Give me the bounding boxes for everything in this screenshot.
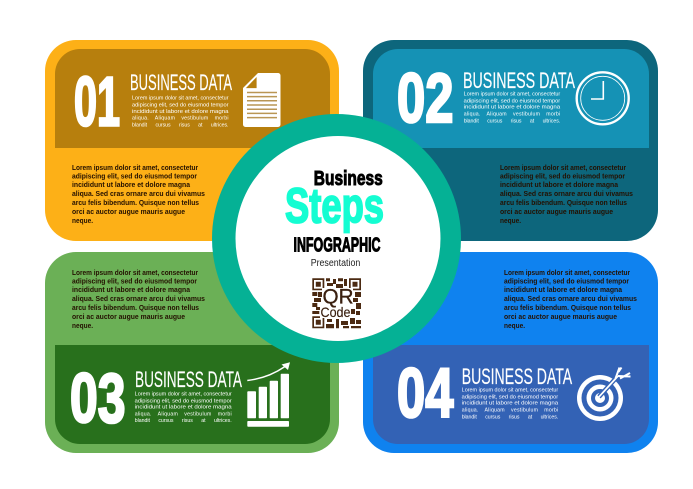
text block: step 03 summary: incididunt ut labore et dolore magna xyxy=(135,404,232,410)
text block: step 04 summary: Lorem ipsum dolor sit amet, consectetur xyxy=(462,388,558,394)
text block: step 02 details: neque. xyxy=(500,216,521,225)
title: Business: Business xyxy=(314,167,383,190)
text block: step 01 summary xyxy=(132,95,229,128)
text block: step 04 summary: aliqua. Aliquam vestibulum morbi xyxy=(462,407,558,413)
text block: step 01 summary: aliqua. Aliquam vestibulum morbi xyxy=(132,116,228,122)
text block: step 04 summary: adipiscing elit, sed do eiusmod tempor xyxy=(462,394,558,400)
text block: step 03 details: neque. xyxy=(72,321,93,330)
text block: step 02 details: incididunt ut labore et dolore magna xyxy=(500,180,619,189)
text block: step 01 details: neque. xyxy=(72,216,93,225)
text block: step 04 details: arcu felis bibendum. Quisque non tellus xyxy=(504,303,631,312)
text block: step 03 summary: aliqua. Aliquam vestibulum morbi xyxy=(135,411,232,417)
text block: step 04 details: aliqua. Sed cras ornare arcu dui vivamus xyxy=(504,294,637,303)
heading: step 02: BUSINESS DATA xyxy=(463,68,575,93)
text block: step 03 details: Lorem ipsum dolor sit amet, consectetur xyxy=(72,268,198,277)
text block: step 02 summary: aliqua. Aliquam vestibulum morbi xyxy=(464,112,560,118)
text block: step 04 details: adipiscing elit, sed do eiusmod tempor xyxy=(504,277,629,286)
text block: step 03 summary: blandit cursus risus at ultrices. xyxy=(135,418,232,424)
panel: central circle xyxy=(212,114,461,363)
title: Steps: Steps xyxy=(285,180,384,234)
text block: step 01 details: Lorem ipsum dolor sit amet, consectetur xyxy=(72,163,198,172)
text block: step 02 details: aliqua. Sed cras ornare arcu dui vivamus xyxy=(500,189,633,198)
text block: step 02 summary xyxy=(464,92,560,124)
text block: step 01 details xyxy=(72,163,205,225)
heading: step 03: BUSINESS DATA xyxy=(135,367,242,392)
text block: step 04 summary: incididunt ut labore et dolore magna xyxy=(462,400,558,406)
icon: rising bar chart xyxy=(247,362,290,427)
text block: step 01 summary: incididunt ut labore et dolore magna xyxy=(132,109,229,115)
text block: step 02 details: Lorem ipsum dolor sit amet, consectetur xyxy=(500,163,626,172)
text block: step 01 details: incididunt ut labore et dolore magna xyxy=(72,180,191,189)
text block: step 04 details: orci ac auctor augue mauris augue xyxy=(504,312,617,321)
icon: target with arrow xyxy=(577,368,630,421)
text block: step 02 details: orci ac auctor augue mauris augue xyxy=(500,207,613,216)
number 04: 04 xyxy=(397,354,454,432)
QR code: QR xyxy=(322,286,354,309)
text block: step 01 details: aliqua. Sed cras ornare arcu dui vivamus xyxy=(72,189,205,198)
text block: step 03 summary xyxy=(135,392,232,424)
text block: step 03 summary: adipiscing elit, sed do eiusmod tempor xyxy=(135,398,232,404)
heading: step 01: BUSINESS DATA xyxy=(130,70,232,95)
panel: step 02 xyxy=(363,40,658,241)
text block: step 02 summary: Lorem ipsum dolor sit amet, consectetur xyxy=(464,92,560,98)
text block: step 02 summary: incididunt ut labore et dolore magna xyxy=(464,105,560,111)
text block: step 01 summary: adipiscing elit, sed do eiusmod tempor xyxy=(132,102,229,108)
subtitle: Presentation: Presentation xyxy=(311,258,360,269)
text block: step 01 details: orci ac auctor augue mauris augue xyxy=(72,207,185,216)
panel: step 01 xyxy=(45,40,339,241)
text block: step 04 details: neque. xyxy=(504,321,525,330)
number 03: 03 xyxy=(70,359,126,437)
title: INFOGRAPHIC: INFOGRAPHIC xyxy=(294,234,380,256)
text block: step 04 details: incididunt ut labore et dolore magna xyxy=(504,285,623,294)
text block: step 01 summary: blandit cursus risus at ultrices. xyxy=(132,122,228,128)
text block: step 03 details: incididunt ut labore et dolore magna xyxy=(72,285,191,294)
text block: step 03 details: orci ac auctor augue mauris augue xyxy=(72,312,185,321)
text block: step 02 summary: adipiscing elit, sed do eiusmod tempor xyxy=(464,99,560,105)
text block: step 02 summary: blandit cursus risus at ultrices. xyxy=(464,118,560,124)
QR code xyxy=(312,278,361,328)
text block: step 01 details: adipiscing elit, sed do eiusmod tempor xyxy=(72,172,197,181)
text block: step 04 details: Lorem ipsum dolor sit amet, consectetur xyxy=(504,268,630,277)
icon: document xyxy=(243,73,280,127)
text block: step 02 details xyxy=(500,163,633,225)
text block: step 03 details: arcu felis bibendum. Quisque non tellus xyxy=(72,303,199,312)
text block: step 03 details xyxy=(72,268,205,330)
heading: step 04: BUSINESS DATA xyxy=(462,364,572,389)
QR code: Code xyxy=(320,304,351,320)
text block: step 04 details xyxy=(504,268,637,330)
text block: step 03 summary: Lorem ipsum dolor sit amet, consectetur xyxy=(135,392,232,398)
panel: step 03 xyxy=(45,252,339,453)
icon: clock xyxy=(577,72,629,124)
text block: step 02 details: arcu felis bibendum. Quisque non tellus xyxy=(500,198,627,207)
number 02: 02 xyxy=(397,59,454,137)
text block: step 04 summary: blandit cursus risus at ultrices. xyxy=(462,414,558,420)
text block: step 03 details: aliqua. Sed cras ornare arcu dui vivamus xyxy=(72,294,205,303)
text block: step 02 details: adipiscing elit, sed do eiusmod tempor xyxy=(500,172,625,181)
number 01: 01 xyxy=(74,62,120,140)
text block: step 01 details: arcu felis bibendum. Quisque non tellus xyxy=(72,198,199,207)
text block: step 01 summary: Lorem ipsum dolor sit amet, consectetur xyxy=(132,95,229,101)
panel: step 04 xyxy=(363,252,658,453)
text block: step 04 summary xyxy=(462,388,558,420)
text block: step 03 details: adipiscing elit, sed do eiusmod tempor xyxy=(72,277,197,286)
